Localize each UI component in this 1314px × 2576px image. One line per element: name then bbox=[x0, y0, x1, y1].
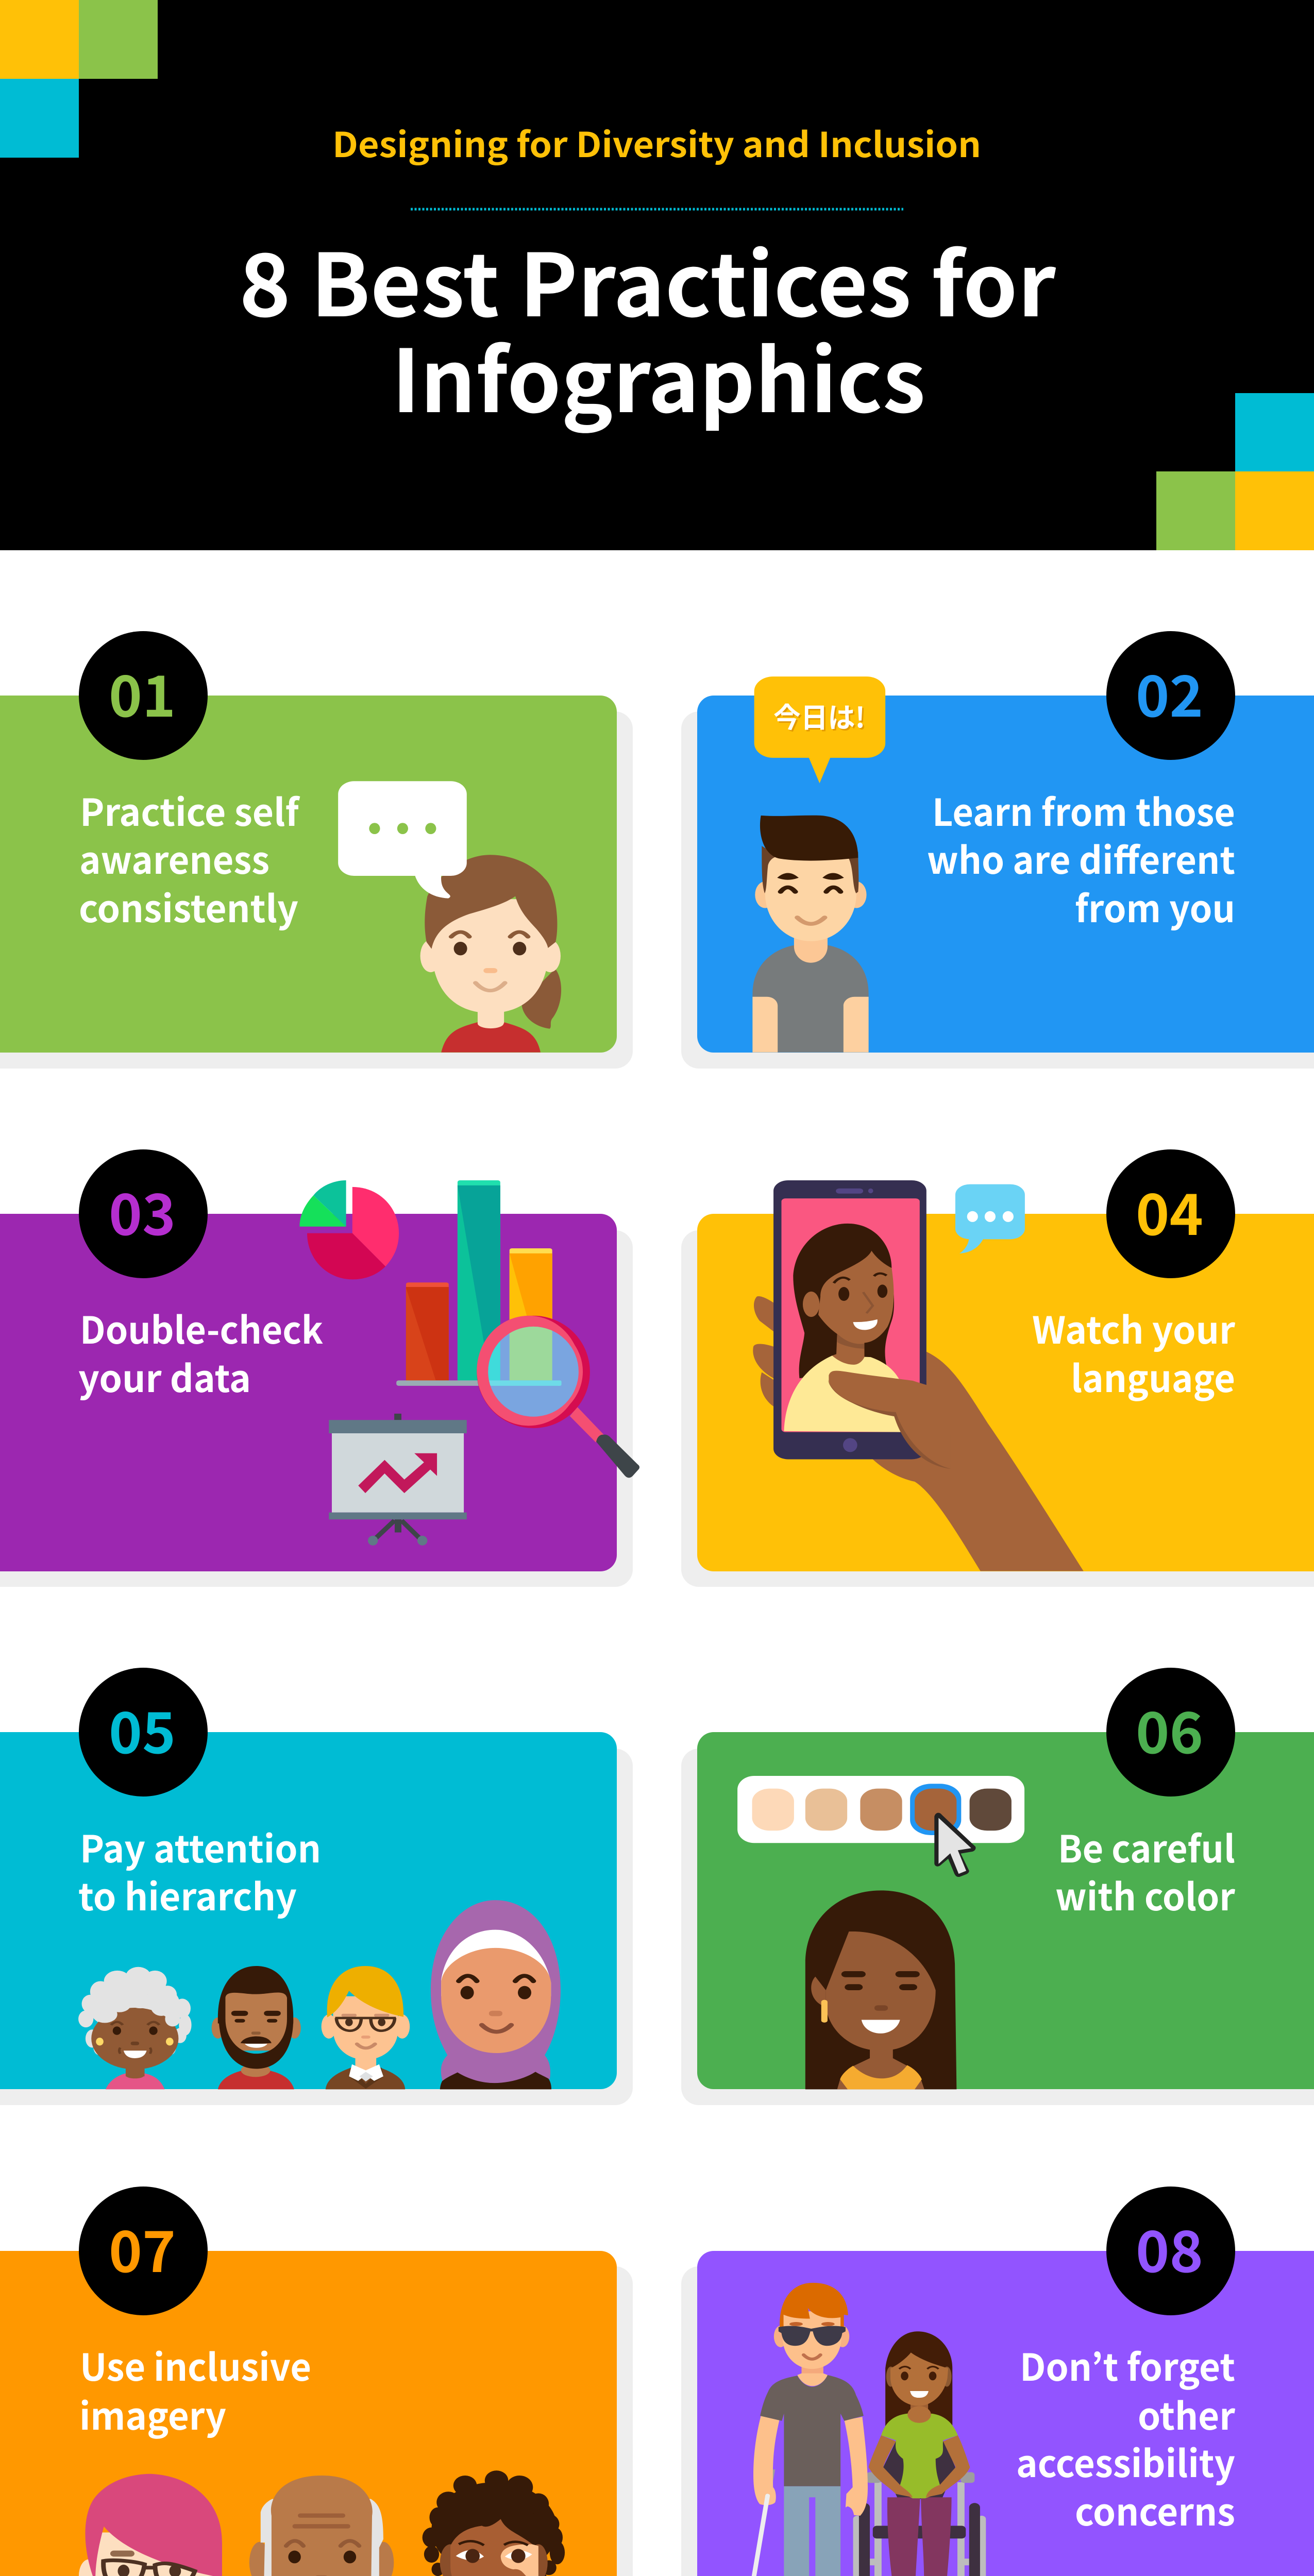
number badge 05: 05 bbox=[109, 1687, 176, 1770]
heading 02: Learn from those bbox=[932, 783, 1235, 837]
number badge 08: 08 bbox=[1136, 2206, 1203, 2289]
bubble text: 今日は! bbox=[773, 695, 865, 736]
number badge 04: 04 bbox=[1136, 1169, 1203, 1251]
heading 01: Practice self bbox=[80, 783, 300, 837]
panel: 05 pay attention to hierarchy bbox=[0, 1668, 633, 2105]
heading 07: Use inclusive bbox=[80, 2337, 311, 2392]
number badge 06: 06 bbox=[1136, 1687, 1203, 1770]
heading 08 bbox=[1016, 2337, 1236, 2536]
illustration: woman with speech bubble bbox=[338, 781, 561, 1053]
heading 01 bbox=[79, 783, 300, 933]
blonde man with glasses bbox=[322, 1966, 410, 2089]
heading 08: other bbox=[1138, 2386, 1236, 2441]
heading 04: Watch your bbox=[1032, 1300, 1236, 1354]
title bbox=[239, 216, 1056, 437]
heading 08: Don’t forget bbox=[1020, 2337, 1235, 2392]
yellow speech bubble bbox=[754, 676, 885, 783]
corner squares top left bbox=[0, 0, 158, 158]
illustration: four diverse faces bbox=[78, 1900, 561, 2089]
panel: 08 accessibility concerns bbox=[681, 2187, 1314, 2576]
number badge 03 bbox=[79, 1149, 208, 1278]
panel: 06 be careful with color bbox=[681, 1668, 1314, 2105]
heading 04 bbox=[1032, 1300, 1236, 1403]
blue chat bubble bbox=[955, 1184, 1025, 1253]
bubble text: 今日は! bbox=[775, 697, 867, 737]
skin tone palette bbox=[737, 1776, 1024, 1843]
woman with vitiligo bbox=[423, 2470, 565, 2576]
bald older man bbox=[249, 2476, 394, 2576]
phone bbox=[773, 1180, 926, 1459]
heading 04: language bbox=[1071, 1349, 1235, 1403]
pie chart bbox=[299, 1180, 399, 1279]
heading 08: concerns bbox=[1075, 2482, 1235, 2536]
panel: 02 learn from those who are different bbox=[681, 631, 1314, 1069]
heading 01: awareness bbox=[79, 831, 269, 885]
number badge 07: 07 bbox=[109, 2206, 176, 2289]
heading 05 bbox=[78, 1819, 321, 1921]
heading 06: with color bbox=[1055, 1867, 1236, 1921]
cursor bbox=[934, 1813, 975, 1877]
speech bubble bbox=[338, 781, 467, 899]
title: Infographics bbox=[392, 312, 925, 437]
heading 03: Double-check bbox=[80, 1300, 323, 1354]
pink haired person bbox=[79, 2474, 222, 2576]
corner squares bottom right bbox=[1156, 393, 1314, 550]
elderly woman bbox=[78, 1967, 192, 2089]
heading 03: your data bbox=[78, 1349, 251, 1403]
illustration: blind man and wheelchair user bbox=[744, 2283, 986, 2576]
illustration: smiling man bbox=[752, 676, 885, 1053]
title: 8 Best Practices for bbox=[239, 216, 1056, 342]
heading 07: imagery bbox=[79, 2386, 226, 2441]
panel: 07 use inclusive imagery bbox=[0, 2187, 633, 2576]
heading 02 bbox=[927, 783, 1235, 933]
number badge 03: 03 bbox=[109, 1169, 176, 1251]
heading 05: to hierarchy bbox=[78, 1867, 297, 1921]
number badge 07 bbox=[79, 2187, 208, 2315]
subtitle: Designing for Diversity and Inclusion bbox=[332, 117, 981, 167]
presentation board bbox=[329, 1414, 467, 1546]
number badge 01: 01 bbox=[109, 651, 176, 733]
number badge 02: 02 bbox=[1136, 651, 1203, 733]
header banner bbox=[0, 0, 1314, 550]
panel: 03 double-check your data bbox=[0, 1149, 639, 1587]
panel: 01 practice self awareness bbox=[0, 631, 633, 1069]
number badge 06 bbox=[1106, 1668, 1235, 1797]
heading 01: consistently bbox=[79, 879, 298, 933]
magnifying glass bbox=[477, 1316, 639, 1478]
number badge 01 bbox=[79, 631, 208, 760]
bar chart bbox=[396, 1180, 562, 1386]
heading 05: Pay attention bbox=[80, 1819, 321, 1873]
heading 08: accessibility bbox=[1016, 2434, 1235, 2488]
woman in hijab bbox=[431, 1900, 561, 2089]
number badge 08 bbox=[1106, 2187, 1235, 2315]
heading 02: who are different bbox=[927, 831, 1235, 885]
illustration: skin tone picker and woman bbox=[737, 1776, 1024, 2089]
panel: 04 watch your language bbox=[681, 1149, 1314, 1587]
illustration: three inclusive portraits bbox=[79, 2470, 565, 2576]
illustration: hand holding phone bbox=[753, 1180, 1084, 1571]
heading 07 bbox=[79, 2337, 311, 2441]
number badge 02 bbox=[1106, 631, 1235, 760]
woman with long hair bbox=[805, 1890, 956, 2089]
illustration: charts and magnifier bbox=[299, 1180, 639, 1546]
number badge 04 bbox=[1106, 1149, 1235, 1278]
man with cane and sunglasses bbox=[744, 2283, 868, 2576]
heading 02: from you bbox=[1075, 879, 1235, 933]
heading 06: Be careful bbox=[1058, 1819, 1235, 1873]
heading 03 bbox=[78, 1300, 323, 1403]
heading 06 bbox=[1055, 1819, 1236, 1921]
number badge 05 bbox=[79, 1668, 208, 1797]
bearded man bbox=[212, 1966, 301, 2089]
woman in wheelchair bbox=[853, 2331, 986, 2576]
